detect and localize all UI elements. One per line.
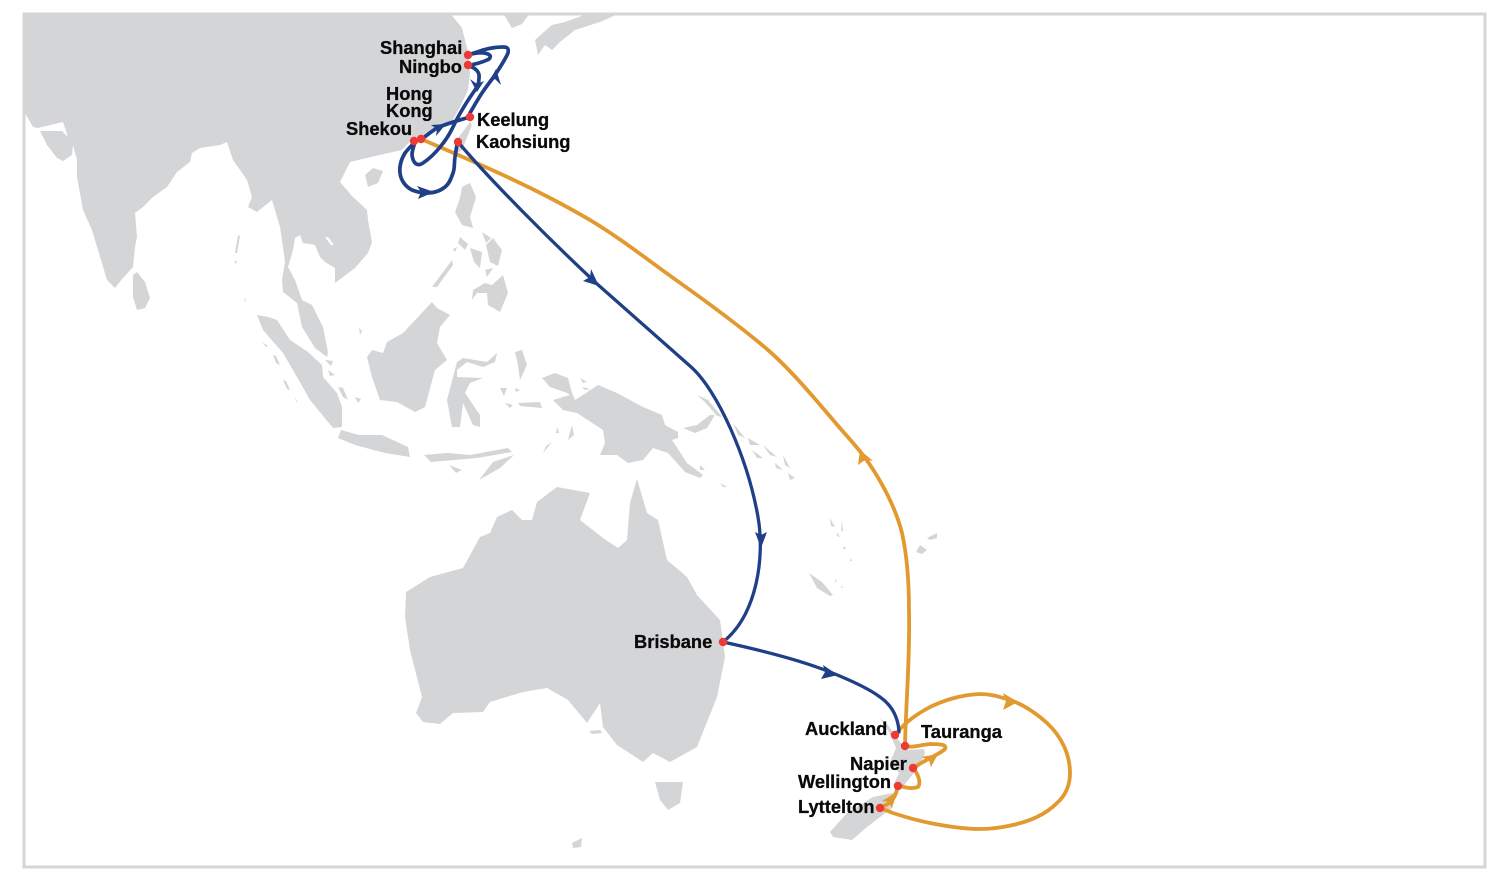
label: Kaohsiung: Kaohsiung	[476, 131, 570, 152]
island: Java	[338, 430, 410, 457]
label: Hong Kong: Hong	[386, 83, 433, 104]
arrowhead: orange Napier	[921, 754, 938, 767]
route: Keelung to Shanghai	[468, 47, 508, 113]
label: Auckland: Auckland	[805, 718, 887, 739]
label: Lyttelton: Lyttelton	[798, 796, 874, 817]
island: Hainan	[365, 168, 383, 187]
arrowhead: blue Ningbo south	[470, 79, 484, 92]
arrowhead: blue Philippine Sea	[583, 269, 599, 286]
island: Sumatra	[257, 315, 342, 428]
label: Shanghai: Shanghai	[380, 37, 462, 58]
route: Napier to Tauranga	[905, 744, 945, 768]
islands: small western Indonesia	[262, 328, 362, 403]
route: Hong Kong to Tauranga	[421, 139, 909, 746]
islands: Melanesia	[580, 378, 795, 487]
label: Wellington: Wellington	[798, 771, 891, 792]
island: Taiwan	[458, 122, 472, 152]
label: Hong Kong: Kong	[386, 100, 433, 121]
routes: blue service	[400, 47, 899, 732]
arrowhead: blue South China Sea	[417, 186, 434, 199]
label: Brisbane: Brisbane	[634, 631, 712, 652]
islands: New Caledonia and Vanuatu	[809, 518, 852, 596]
landmass: Australia	[405, 479, 725, 762]
islands: Lesser Sunda	[424, 448, 514, 480]
label: Shekou: Shekou	[346, 118, 412, 139]
port markers	[410, 51, 917, 812]
label: Keelung: Keelung	[477, 109, 549, 130]
islands: Japan	[535, 16, 614, 55]
routes: orange service	[421, 139, 1070, 829]
route: Hong Kong to Keelung	[422, 117, 470, 139]
island: Sri Lanka	[133, 272, 150, 310]
base map: landmasses	[23, 13, 937, 848]
route: Kaohsiung loop to Shekou	[400, 142, 458, 193]
port labels	[346, 37, 1003, 817]
lake: Tonle Sap	[325, 237, 334, 245]
route: Kaohsiung to Brisbane	[458, 142, 760, 642]
islands: Andaman and Nicobar	[235, 235, 246, 302]
arrowhead: orange Lyttelton	[882, 792, 897, 808]
arrowhead: blue Coral Sea	[755, 532, 767, 548]
arrowhead: blue Keelung north	[488, 69, 501, 85]
island: Borneo	[367, 302, 450, 412]
route: Auckland to Lyttelton loop	[880, 694, 1070, 829]
island: Tasmania	[655, 782, 683, 810]
route: Ningbo to Shekou	[412, 66, 479, 165]
route: Brisbane to Auckland	[723, 642, 899, 732]
island: New Zealand North Island	[880, 718, 925, 790]
label: Tauranga: Tauranga	[921, 721, 1003, 742]
route: Shanghai to Ningbo	[468, 53, 490, 66]
arrowhead: orange east loop	[1003, 693, 1018, 710]
island: New Zealand South Island	[830, 792, 897, 840]
label: Napier: Napier	[850, 753, 907, 774]
arrowhead: blue Tasman Sea	[821, 665, 838, 679]
islands: Fiji	[916, 533, 937, 554]
label: Ningbo: Ningbo	[399, 56, 462, 77]
route: Lyttelton to Wellington	[880, 785, 898, 808]
route: Wellington to Napier	[898, 768, 919, 788]
arrowhead: orange northbound	[858, 450, 873, 465]
island: Kangaroo Island	[589, 730, 602, 734]
island: Sulawesi	[447, 353, 497, 427]
island: small southern islet	[572, 838, 582, 848]
islands: Philippines	[432, 183, 508, 312]
island: New Guinea	[542, 373, 703, 478]
landmass: mainland Asia	[23, 13, 470, 357]
landmass: Korea	[504, 16, 528, 28]
islands: Maluku	[500, 350, 574, 453]
arrowhead: blue Hong Kong east	[431, 124, 446, 136]
